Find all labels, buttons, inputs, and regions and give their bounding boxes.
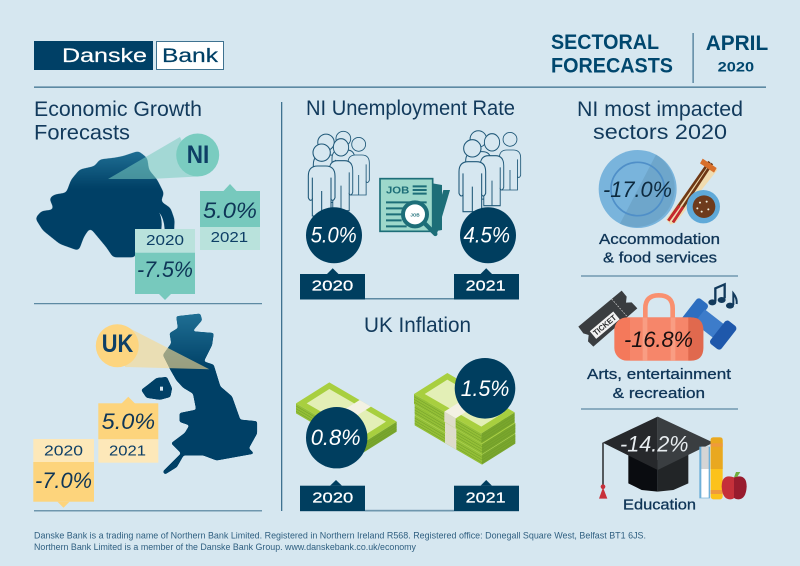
stat: inflation 2020: 0.8%	[311, 425, 361, 450]
heading: NI unemployment rate: NI Unemployment Rate	[306, 97, 515, 120]
map: United Kingdom	[142, 314, 257, 474]
title: sectoral forecasts: SECTORAL	[551, 31, 659, 54]
logo: Danske Bank: Bank	[162, 46, 219, 67]
icon: banknotes 2020	[296, 382, 397, 453]
icon: crowd 2021	[459, 131, 521, 212]
stat: unemployment 2020: 5.0%	[311, 222, 357, 247]
title: sectoral forecasts: FORECASTS	[551, 54, 673, 77]
NI 2020 forecast box: -7.5%	[137, 257, 193, 282]
heading: UK inflation: UK Inflation	[364, 314, 471, 337]
logo: Danske Bank	[34, 41, 224, 70]
stat: unemployment 2021: 4.5%	[464, 222, 510, 247]
label: arts, entertainment and recreation	[587, 366, 732, 402]
title: sectoral forecasts: APRIL	[706, 32, 768, 55]
NI 2021 forecast box: 5.0%	[203, 198, 257, 223]
NI 2020 forecast box: 2020	[146, 232, 184, 249]
panel: economic growth forecasts	[33, 98, 260, 508]
heading: economic growth forecasts: Economic Growth	[34, 98, 202, 121]
stat: unemployment 2021	[460, 207, 516, 263]
UK 2021 forecast box: 2021	[109, 443, 146, 460]
title: sectoral forecasts: 2020	[718, 60, 754, 75]
icon: graduation cap, books and apple	[599, 417, 747, 499]
stat: inflation 2020	[306, 407, 367, 468]
label: accommodation and food services: Accommodation	[599, 231, 720, 248]
stat: accommodation -17.0%: -17.0%	[603, 177, 672, 202]
heading: NI most impacted sectors 2020: NI most impacted	[577, 98, 743, 121]
year tab 2021: 2021	[466, 490, 506, 507]
icon: job newspaper with magnifier: JOB	[410, 212, 420, 217]
label: arts, entertainment and recreation: Arts, entertainment	[587, 366, 732, 383]
year tab 2020: 2020	[312, 490, 353, 507]
year tab 2020	[300, 268, 365, 300]
label: accommodation and food services	[599, 231, 720, 267]
icon: job newspaper with magnifier: JOB	[386, 185, 409, 196]
panel: NI unemployment rate	[300, 97, 521, 300]
icon: crowd 2020	[308, 131, 369, 216]
callout: UK marker: UK	[102, 330, 133, 358]
callout: NI marker	[108, 134, 219, 179]
label: arts, entertainment and recreation: & recreation	[613, 385, 705, 402]
stat: education -14.2%: -14.2%	[620, 432, 688, 457]
heading: economic growth forecasts: Forecasts	[34, 122, 130, 144]
icon: ticket, bag, dumbbell and music	[578, 284, 738, 361]
stat: inflation 2021: 1.5%	[461, 376, 509, 401]
year tab 2021: 2021	[466, 278, 506, 295]
UK 2020 forecast box: -7.0%	[35, 468, 92, 493]
footer text: Northern Bank Limited is a member of the Danske Bank Group. www.danskebank.co.uk/economy	[34, 542, 416, 553]
label: accommodation and food services: & food services	[603, 250, 717, 267]
NI 2021 forecast box: 2021	[211, 229, 248, 246]
panel: UK inflation	[296, 314, 519, 512]
stat: unemployment 2020	[306, 207, 362, 263]
UK 2020 forecast box	[33, 439, 94, 508]
NI 2021 forecast box	[200, 184, 260, 250]
panel: NI most impacted sectors	[577, 98, 747, 514]
map: Northern Ireland	[36, 152, 174, 257]
NI 2020 forecast box	[135, 229, 195, 300]
callout: NI marker: NI	[187, 141, 209, 169]
year tab 2020: 2020	[312, 278, 353, 295]
UK 2020 forecast box: 2020	[44, 443, 83, 460]
footer text: Danske Bank is a trading name of Northern Bank Limited. Registered in Northern Ireland R568. Registered office: Donegall Square West, Belfast BT1 6JS.	[34, 530, 646, 542]
year tab 2021	[454, 480, 519, 511]
heading: NI most impacted sectors 2020	[577, 98, 743, 144]
title: sectoral forecasts	[551, 31, 768, 83]
UK 2021 forecast box: 5.0%	[102, 409, 155, 434]
callout: UK marker	[96, 324, 209, 369]
logo: Danske Bank: Danske	[62, 46, 147, 67]
icon: banknote stack 2021	[414, 373, 515, 465]
icon: ticket, bag, dumbbell and music: TICKET	[591, 313, 618, 338]
icon: plate with chopsticks and bowl	[599, 150, 720, 228]
year tab 2020	[300, 480, 365, 511]
heading: NI most impacted sectors 2020: sectors 2020	[593, 121, 727, 144]
label: education: Education	[623, 496, 696, 514]
stat: inflation 2021	[455, 358, 515, 419]
UK 2021 forecast box	[98, 397, 158, 463]
heading: economic growth forecasts	[34, 98, 202, 144]
stat: arts -16.8%: -16.8%	[624, 327, 693, 352]
year tab 2021	[454, 268, 519, 300]
icon: job newspaper with magnifier	[380, 179, 450, 234]
footer text	[34, 530, 646, 553]
